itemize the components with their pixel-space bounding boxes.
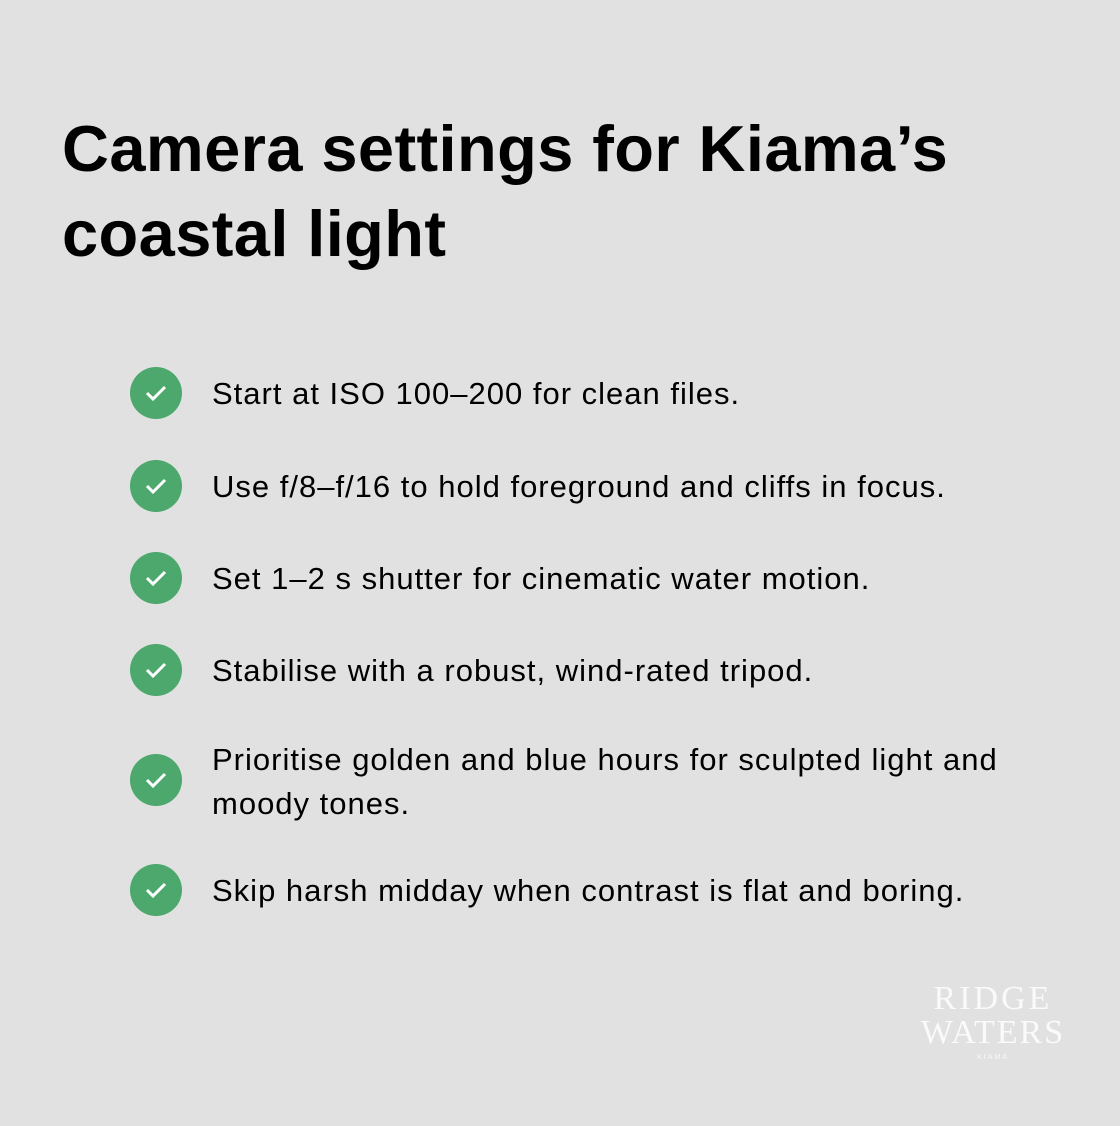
item 1 — [130, 367, 740, 419]
item 2: Use f/8–f/16 to hold foreground and cliffs in focus. — [212, 469, 946, 504]
item 2 — [130, 460, 946, 512]
item 3 — [130, 552, 870, 604]
item 4: Stabilise with a robust, wind-rated tripod. — [212, 653, 813, 688]
logo: RIDGE — [934, 980, 1052, 1017]
item 5: moody tones. — [212, 786, 410, 821]
logo — [921, 980, 1065, 1061]
item 4 — [130, 644, 813, 696]
title — [62, 112, 948, 270]
title: Camera settings for Kiama’s — [62, 112, 948, 185]
logo: KIAMA — [977, 1054, 1009, 1061]
item 3: Set 1–2 s shutter for cinematic water motion. — [212, 561, 870, 596]
title: coastal light — [62, 197, 446, 270]
item 1: Start at ISO 100–200 for clean files. — [212, 376, 740, 411]
logo: WATERS — [921, 1014, 1065, 1051]
item 6 — [130, 864, 964, 916]
item 6: Skip harsh midday when contrast is flat and boring. — [212, 873, 964, 908]
item 5 — [130, 742, 998, 821]
item 5: Prioritise golden and blue hours for sculpted light and — [212, 742, 998, 777]
